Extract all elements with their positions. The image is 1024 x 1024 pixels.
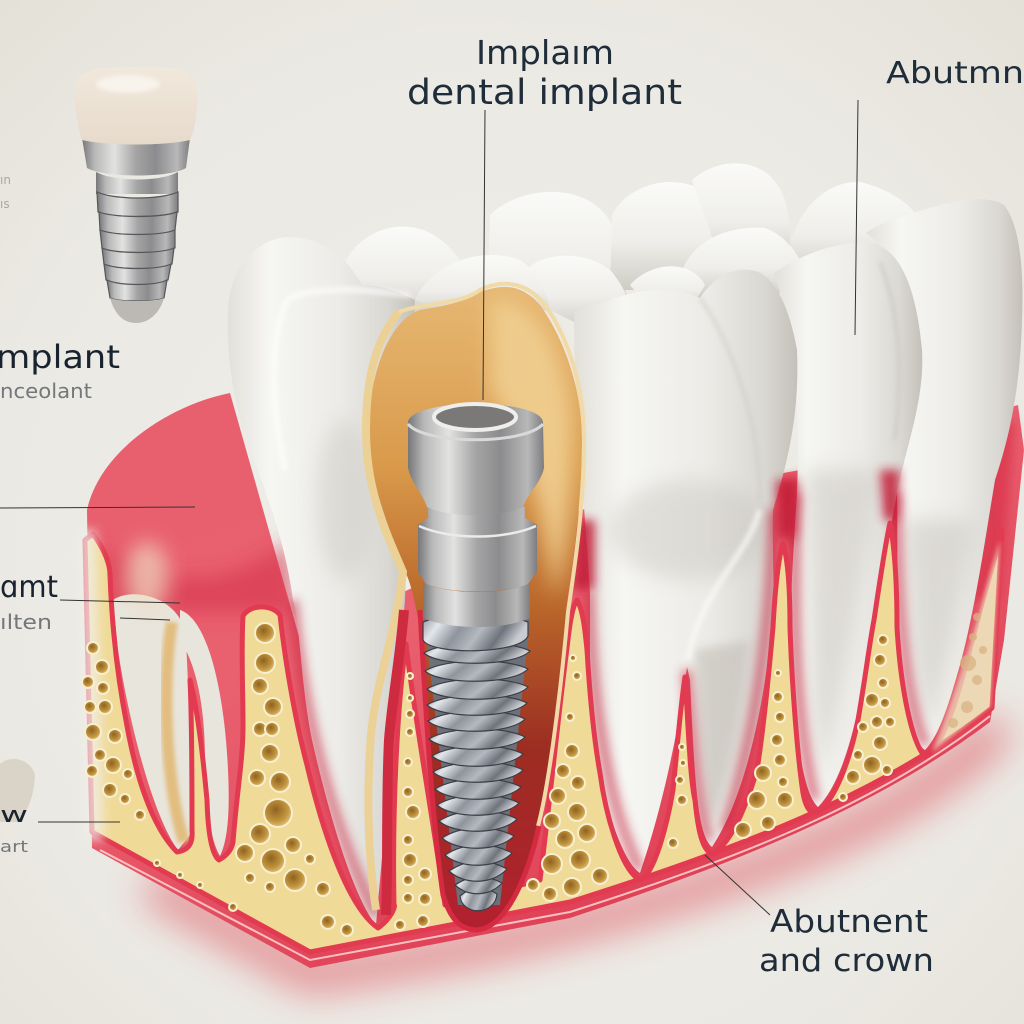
label: left crown xyxy=(0,803,28,856)
lower socket outline xyxy=(420,610,539,930)
root edge shading xyxy=(293,493,925,915)
label: abutment and crown xyxy=(759,904,934,979)
label: left abutment: ɑmt xyxy=(0,570,58,605)
small crown fragment xyxy=(0,759,35,822)
faint cropped labels: ıs xyxy=(0,197,10,211)
head xyxy=(408,404,544,515)
cusp crease xyxy=(700,298,760,500)
label: abutment and crown: Abutnent xyxy=(770,904,928,940)
cavity interior xyxy=(368,287,582,928)
gum deep tone near root crest xyxy=(100,540,296,612)
label: top implant: dental implant xyxy=(407,73,682,113)
implant xyxy=(408,404,544,911)
crown hollow xyxy=(96,75,160,93)
left pale wall xyxy=(366,312,403,910)
bone pores xyxy=(82,623,895,936)
right bone fade xyxy=(932,540,1000,752)
screw threads xyxy=(97,192,178,301)
deep gum between teeth xyxy=(570,470,900,590)
back row of teeth xyxy=(343,163,914,330)
left socket strip xyxy=(386,610,404,915)
thread core xyxy=(424,620,530,905)
tooth: front molar xyxy=(574,270,797,873)
label: left crown: w xyxy=(0,803,28,828)
lower collar xyxy=(423,583,530,627)
left tooth roots xyxy=(113,542,229,856)
red glow under jaw xyxy=(150,725,1000,975)
implant site cut-away xyxy=(366,284,584,930)
faint cropped labels xyxy=(0,173,11,211)
wall-side shadow xyxy=(317,420,373,580)
head rim xyxy=(408,424,543,440)
root ridge highlight xyxy=(688,510,760,660)
screw tip xyxy=(110,298,164,323)
alveolar bone xyxy=(85,523,1002,952)
threads xyxy=(423,614,530,911)
label: abutment and crown: and crown xyxy=(759,943,934,979)
neck xyxy=(96,172,178,194)
label: left implant xyxy=(0,338,120,403)
left bone fade xyxy=(78,530,104,840)
tooth: centre right xyxy=(774,242,922,807)
label: top implant xyxy=(407,33,682,113)
jaw band highlight xyxy=(100,716,990,960)
head opening xyxy=(434,404,516,430)
label: top implant: Implaım xyxy=(476,33,614,72)
label: left abutment xyxy=(0,570,58,634)
middle collar xyxy=(418,507,537,592)
small implant illustration xyxy=(75,67,197,323)
label: abutment top right: Abutmn xyxy=(886,56,1024,91)
second cusp ridge xyxy=(274,290,410,470)
label: left abutment: ılten xyxy=(0,610,52,634)
label: left crown: art xyxy=(0,837,28,856)
label: left implant: nceolant xyxy=(0,379,92,403)
top wall edge xyxy=(399,284,584,826)
faint cropped labels: ın xyxy=(0,173,11,187)
right gum deep tone xyxy=(780,420,1015,600)
tooth with cut-away body xyxy=(228,237,415,925)
leader lines xyxy=(0,100,858,915)
collar ridge xyxy=(419,526,536,536)
tooth: far right xyxy=(866,199,1022,750)
abutment xyxy=(82,138,190,176)
crown neck shadow xyxy=(610,480,770,580)
ceramic crown xyxy=(75,67,197,144)
cavity light area xyxy=(490,300,573,600)
gum base xyxy=(87,393,1024,968)
rear root shadow xyxy=(695,640,750,825)
pale right pores xyxy=(948,613,987,728)
